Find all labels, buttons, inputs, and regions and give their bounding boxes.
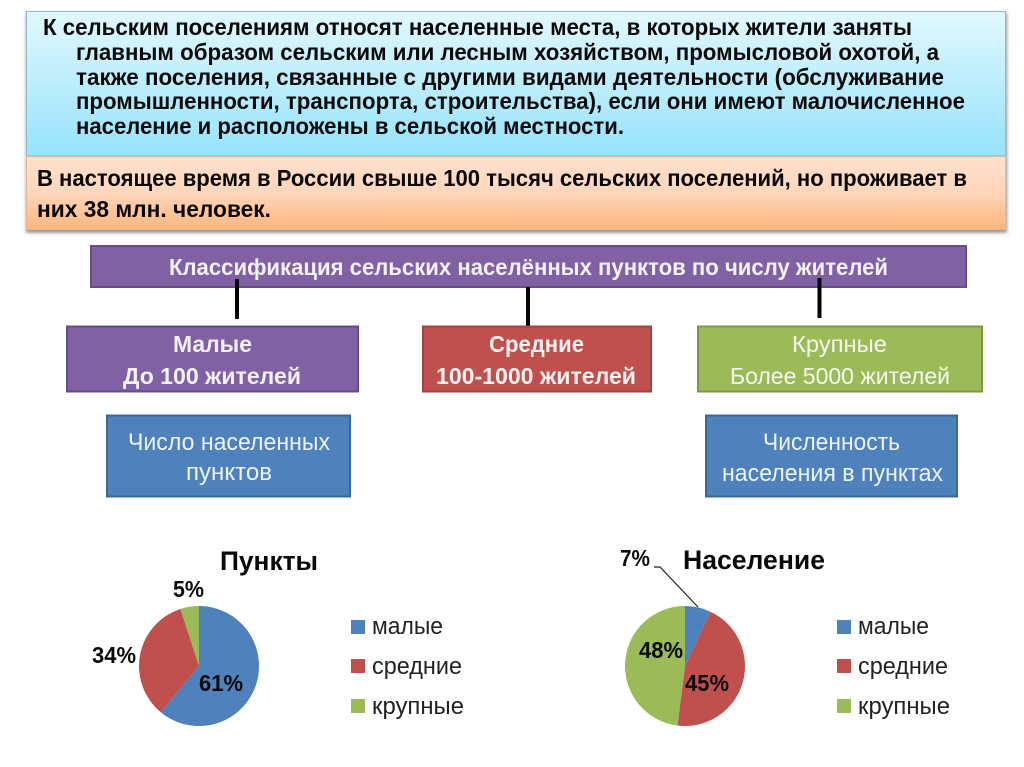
definition text: промышленности, транспорта, строительства), если они имеют малочисленное	[76, 88, 965, 114]
data labels: 5%	[173, 576, 204, 602]
legend: малые	[858, 613, 929, 640]
definition text: также поселения, связанные с другими видами деятельности (обслуживание	[76, 64, 944, 90]
definition text: главным образом сельским или лесным хозяйством, промысловой охотой, а	[76, 39, 939, 65]
chart title: Население: Население	[683, 545, 825, 575]
leader line	[654, 567, 698, 607]
box: small settlements	[67, 326, 358, 392]
legend: средние	[858, 653, 948, 680]
data labels: 34%	[92, 642, 136, 668]
box: population in settlements: Численность	[763, 429, 900, 456]
data labels	[92, 576, 243, 696]
box: small settlements: Малые	[173, 331, 252, 357]
heading: classification box: Классификация сельских населённых пунктов по числу жителей	[169, 254, 888, 280]
connector: to small	[235, 279, 239, 319]
data labels: 48%	[639, 637, 683, 663]
legend: крупные	[372, 693, 464, 720]
statistic text	[37, 165, 967, 222]
legend	[837, 613, 950, 720]
statistic text: них 38 млн. человек.	[37, 196, 271, 222]
heading: classification box	[91, 246, 966, 287]
box: medium settlements: Средние	[489, 331, 584, 357]
box: population in settlements: населения в пунктах	[722, 460, 943, 487]
box: large settlements: Более 5000 жителей	[730, 363, 950, 389]
box: population in settlements	[706, 416, 957, 496]
box: number of settlements	[107, 416, 350, 496]
box: large settlements	[698, 326, 982, 392]
chart title: Пункты: Пункты	[220, 546, 318, 576]
legend: крупные	[858, 693, 950, 720]
connector: to large	[818, 278, 822, 318]
data labels	[620, 545, 729, 696]
statistic text: В настоящее время в России свыше 100 тысяч сельских поселений, но проживает в	[37, 165, 967, 191]
pie slices	[625, 606, 745, 726]
legend: малые	[372, 613, 443, 640]
data labels: 7%	[620, 545, 650, 571]
data labels: 45%	[685, 670, 729, 696]
box: number of settlements: пунктов	[186, 459, 272, 486]
box: large settlements: Крупные	[792, 331, 887, 357]
legend: средние	[372, 653, 462, 680]
panel: settlements statistic	[26, 156, 1006, 230]
box: medium settlements: 100-1000 жителей	[436, 363, 636, 389]
definition text	[43, 14, 965, 139]
chart: population pie	[620, 545, 950, 726]
legend	[351, 613, 464, 720]
panel: definition of rural settlements	[26, 12, 1007, 233]
box: medium settlements	[423, 326, 651, 392]
connector: to medium	[526, 287, 530, 326]
chart: settlements pie	[92, 546, 464, 726]
box: small settlements: До 100 жителей	[123, 363, 301, 389]
pie slices	[139, 606, 259, 726]
data labels: 61%	[199, 670, 243, 696]
box: number of settlements: Число населенных	[128, 429, 330, 456]
definition text: население и расположены в сельской местности.	[76, 113, 624, 139]
definition text: К сельским поселениям относят населенные места, в которых жители заняты	[43, 14, 912, 40]
